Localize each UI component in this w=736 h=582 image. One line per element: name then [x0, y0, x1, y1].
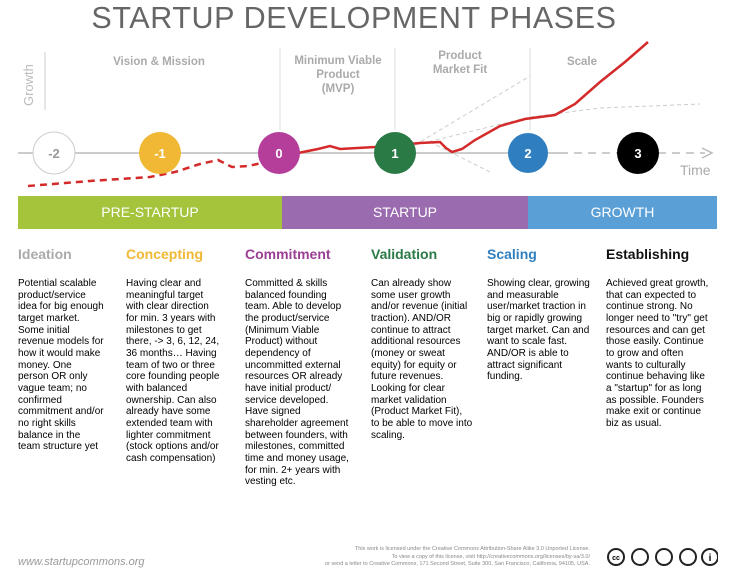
text: validation: additional resources	[371, 336, 460, 347]
text: concepting: there, -> 3, 6, 12, 24,	[126, 336, 219, 347]
text: establishing: continue behaving like	[606, 371, 705, 382]
text: scaling: and measurable	[487, 290, 559, 301]
text: ideation: how it would make	[18, 348, 100, 359]
text: commitment: shareholder agreement	[245, 418, 348, 429]
cc icons: cc	[612, 555, 620, 562]
text: scaling: big or rapidly growing	[487, 313, 582, 324]
text: validation: Looking for clear	[371, 383, 445, 394]
license text	[325, 546, 590, 567]
text: ideation: commitment and/or	[18, 406, 104, 417]
title: STARTUP DEVELOPMENT PHASES	[91, 1, 617, 35]
text: concepting: with clear direction	[126, 301, 209, 312]
text: establishing: wants to culturally	[606, 360, 685, 371]
text: concepting: already have some	[126, 406, 210, 417]
text: ideation: product/service	[18, 290, 86, 301]
text: establishing: those easily. Continue	[606, 336, 704, 347]
text: concepting	[126, 278, 219, 464]
band: growth	[528, 196, 717, 229]
text: validation: market validation	[371, 395, 447, 406]
text: scaling: attract significant	[487, 360, 562, 371]
text: concepting: milestones to get	[126, 325, 202, 336]
phase labels: Scale	[567, 56, 597, 68]
milestone circles: 1	[391, 146, 399, 161]
milestone circles: 2	[524, 146, 532, 161]
text: concepting: team of two or three	[126, 360, 215, 371]
text: concepting: Having clear and	[126, 278, 201, 289]
milestone circles: -2	[48, 146, 60, 161]
text: establishing: biz as usual.	[606, 418, 662, 429]
text: establishing: longer need to "try" get	[606, 313, 708, 324]
axis: time	[18, 148, 712, 178]
heading: establishing: Establishing	[606, 246, 689, 262]
text: validation: and/or revenue (initial	[371, 301, 467, 312]
text: validation: continue to attract	[371, 325, 450, 336]
text: concepting: lighter commitment	[126, 430, 210, 441]
axis: growth	[21, 52, 45, 110]
text: validation: (money or sweat	[371, 348, 445, 359]
text: scaling	[487, 278, 590, 382]
text: concepting: ownership. Can also	[126, 395, 217, 406]
text: commitment: milestones, committed	[245, 441, 344, 452]
text: validation	[371, 278, 472, 441]
text: ideation: target market.	[18, 313, 80, 324]
axis: time: Time	[680, 162, 711, 178]
band: pre-startup	[18, 196, 282, 229]
text: commitment: time and money usage,	[245, 453, 349, 464]
text: commitment: have initial product/	[245, 383, 331, 394]
text: commitment: Product) without	[245, 336, 317, 347]
phase labels: (MVP)	[322, 83, 354, 95]
text: concepting: extended team with	[126, 418, 213, 429]
text: commitment: the product/service	[245, 313, 330, 324]
text: commitment: uncommitted external	[245, 360, 341, 371]
band: pre-startup: PRE-STARTUP	[101, 204, 199, 220]
text: establishing: to grow and often	[606, 348, 683, 359]
timeline chart	[18, 41, 714, 188]
growth curve	[28, 42, 648, 186]
text: commitment: Have signed	[245, 406, 301, 417]
heading: commitment: Commitment	[245, 246, 331, 262]
text: commitment: for min. 2+ years with	[245, 464, 340, 476]
heading: scaling: Scaling	[487, 246, 537, 262]
license text: This work is licensed under the Creative Commons Attribution-Share Alike 3.0 Unported License.	[355, 546, 590, 552]
footer url: www.startupcommons.org	[18, 556, 145, 568]
text: concepting: meaningful target	[126, 290, 203, 301]
text: ideation: idea for big enough	[18, 301, 104, 312]
text: validation: Can already show	[371, 278, 451, 289]
text: commitment: vesting etc.	[245, 476, 296, 487]
text: commitment: resources OR already	[245, 371, 342, 382]
text: validation: scaling.	[371, 430, 405, 441]
phase labels: Product	[438, 50, 482, 62]
heading: ideation: Ideation	[18, 246, 72, 262]
text: establishing: continue strong. No	[606, 301, 693, 312]
text: scaling: AND/OR is able to	[487, 348, 569, 359]
text: ideation: Potential scalable	[18, 278, 96, 289]
license text: To view a copy of this license, visit http://creativecommons.org/licenses/by-sa/3.0/	[392, 554, 590, 560]
text: concepting: for min. 3 years with	[126, 313, 215, 324]
text: concepting: core founding people	[126, 371, 219, 382]
text: commitment: balanced founding	[245, 290, 327, 301]
band: startup	[282, 196, 528, 229]
phase labels: Product	[316, 69, 360, 81]
phase labels: Market Fit	[433, 64, 487, 76]
text: commitment: dependency of	[245, 348, 311, 359]
text: ideation: revenue models for	[18, 336, 104, 347]
text: ideation: person OR only	[18, 371, 87, 382]
text: scaling: target market. Can and	[487, 325, 589, 336]
text: scaling: funding.	[487, 371, 523, 382]
text: establishing: a "startup" for as long	[606, 383, 701, 394]
axis: growth: Growth	[21, 64, 36, 106]
text: ideation: no right skills	[18, 418, 76, 429]
text: concepting: (stock options and/or	[126, 441, 219, 452]
milestone circles: -1	[154, 146, 166, 161]
milestone circles	[33, 132, 659, 174]
text: commitment	[245, 278, 349, 487]
text: establishing: that can expected to	[606, 290, 696, 301]
band: startup: STARTUP	[373, 204, 437, 220]
license text: or send a letter to Creative Commons, 171 Second Street, Suite 300, San Francisco, California, 94105, USA.	[325, 561, 590, 567]
text: commitment: between founders, with	[245, 430, 348, 441]
text: establishing: as possible. Founders	[606, 395, 704, 406]
text: concepting: with balanced	[126, 383, 187, 394]
text: commitment: team. Able to develop	[245, 301, 341, 312]
text: commitment: service developed.	[245, 395, 328, 406]
text: validation: equity) for equity or	[371, 360, 457, 371]
milestone circles: 3	[634, 146, 642, 161]
text: ideation: team structure yet	[18, 441, 98, 452]
text: concepting: 36 months… Having	[126, 348, 217, 359]
text: concepting: cash compensation)	[126, 453, 216, 464]
text: commitment: (Minimum Viable	[245, 325, 319, 336]
text: establishing	[606, 278, 708, 429]
heading: concepting: Concepting	[126, 246, 203, 262]
text: validation: some user growth	[371, 290, 450, 301]
text: scaling: Showing clear, growing	[487, 278, 590, 289]
scenario dashed lines	[415, 76, 700, 172]
milestone circles: 0	[275, 146, 283, 161]
text: validation: traction). AND/OR	[371, 313, 451, 324]
phase labels: Minimum Viable	[294, 55, 382, 67]
text: establishing: Achieved great growth,	[606, 278, 708, 289]
text: ideation	[18, 278, 104, 452]
phase labels	[113, 50, 597, 95]
band: growth: GROWTH	[591, 204, 654, 220]
text: ideation: money. One	[18, 360, 72, 371]
cc icons: i	[709, 553, 712, 564]
text: ideation: vague team; no	[18, 383, 87, 394]
text: commitment: Committed & skills	[245, 278, 327, 289]
cc icons	[607, 548, 718, 566]
text: ideation: Some initial	[18, 325, 70, 336]
text: scaling: want to scale fast.	[487, 336, 567, 347]
heading: validation: Validation	[371, 246, 437, 262]
text: ideation: balance in the	[18, 430, 80, 441]
phase labels: Vision & Mission	[113, 56, 205, 68]
text: establishing: make exit or continue	[606, 406, 701, 417]
text: validation: (Product Market Fit),	[371, 406, 462, 417]
text: establishing: resources and can get	[606, 325, 705, 336]
text: scaling: user/market traction in	[487, 301, 586, 312]
text: validation: to be able to move into	[371, 418, 472, 429]
text: ideation: confirmed	[18, 395, 62, 406]
text: validation: future revenues.	[371, 371, 443, 382]
